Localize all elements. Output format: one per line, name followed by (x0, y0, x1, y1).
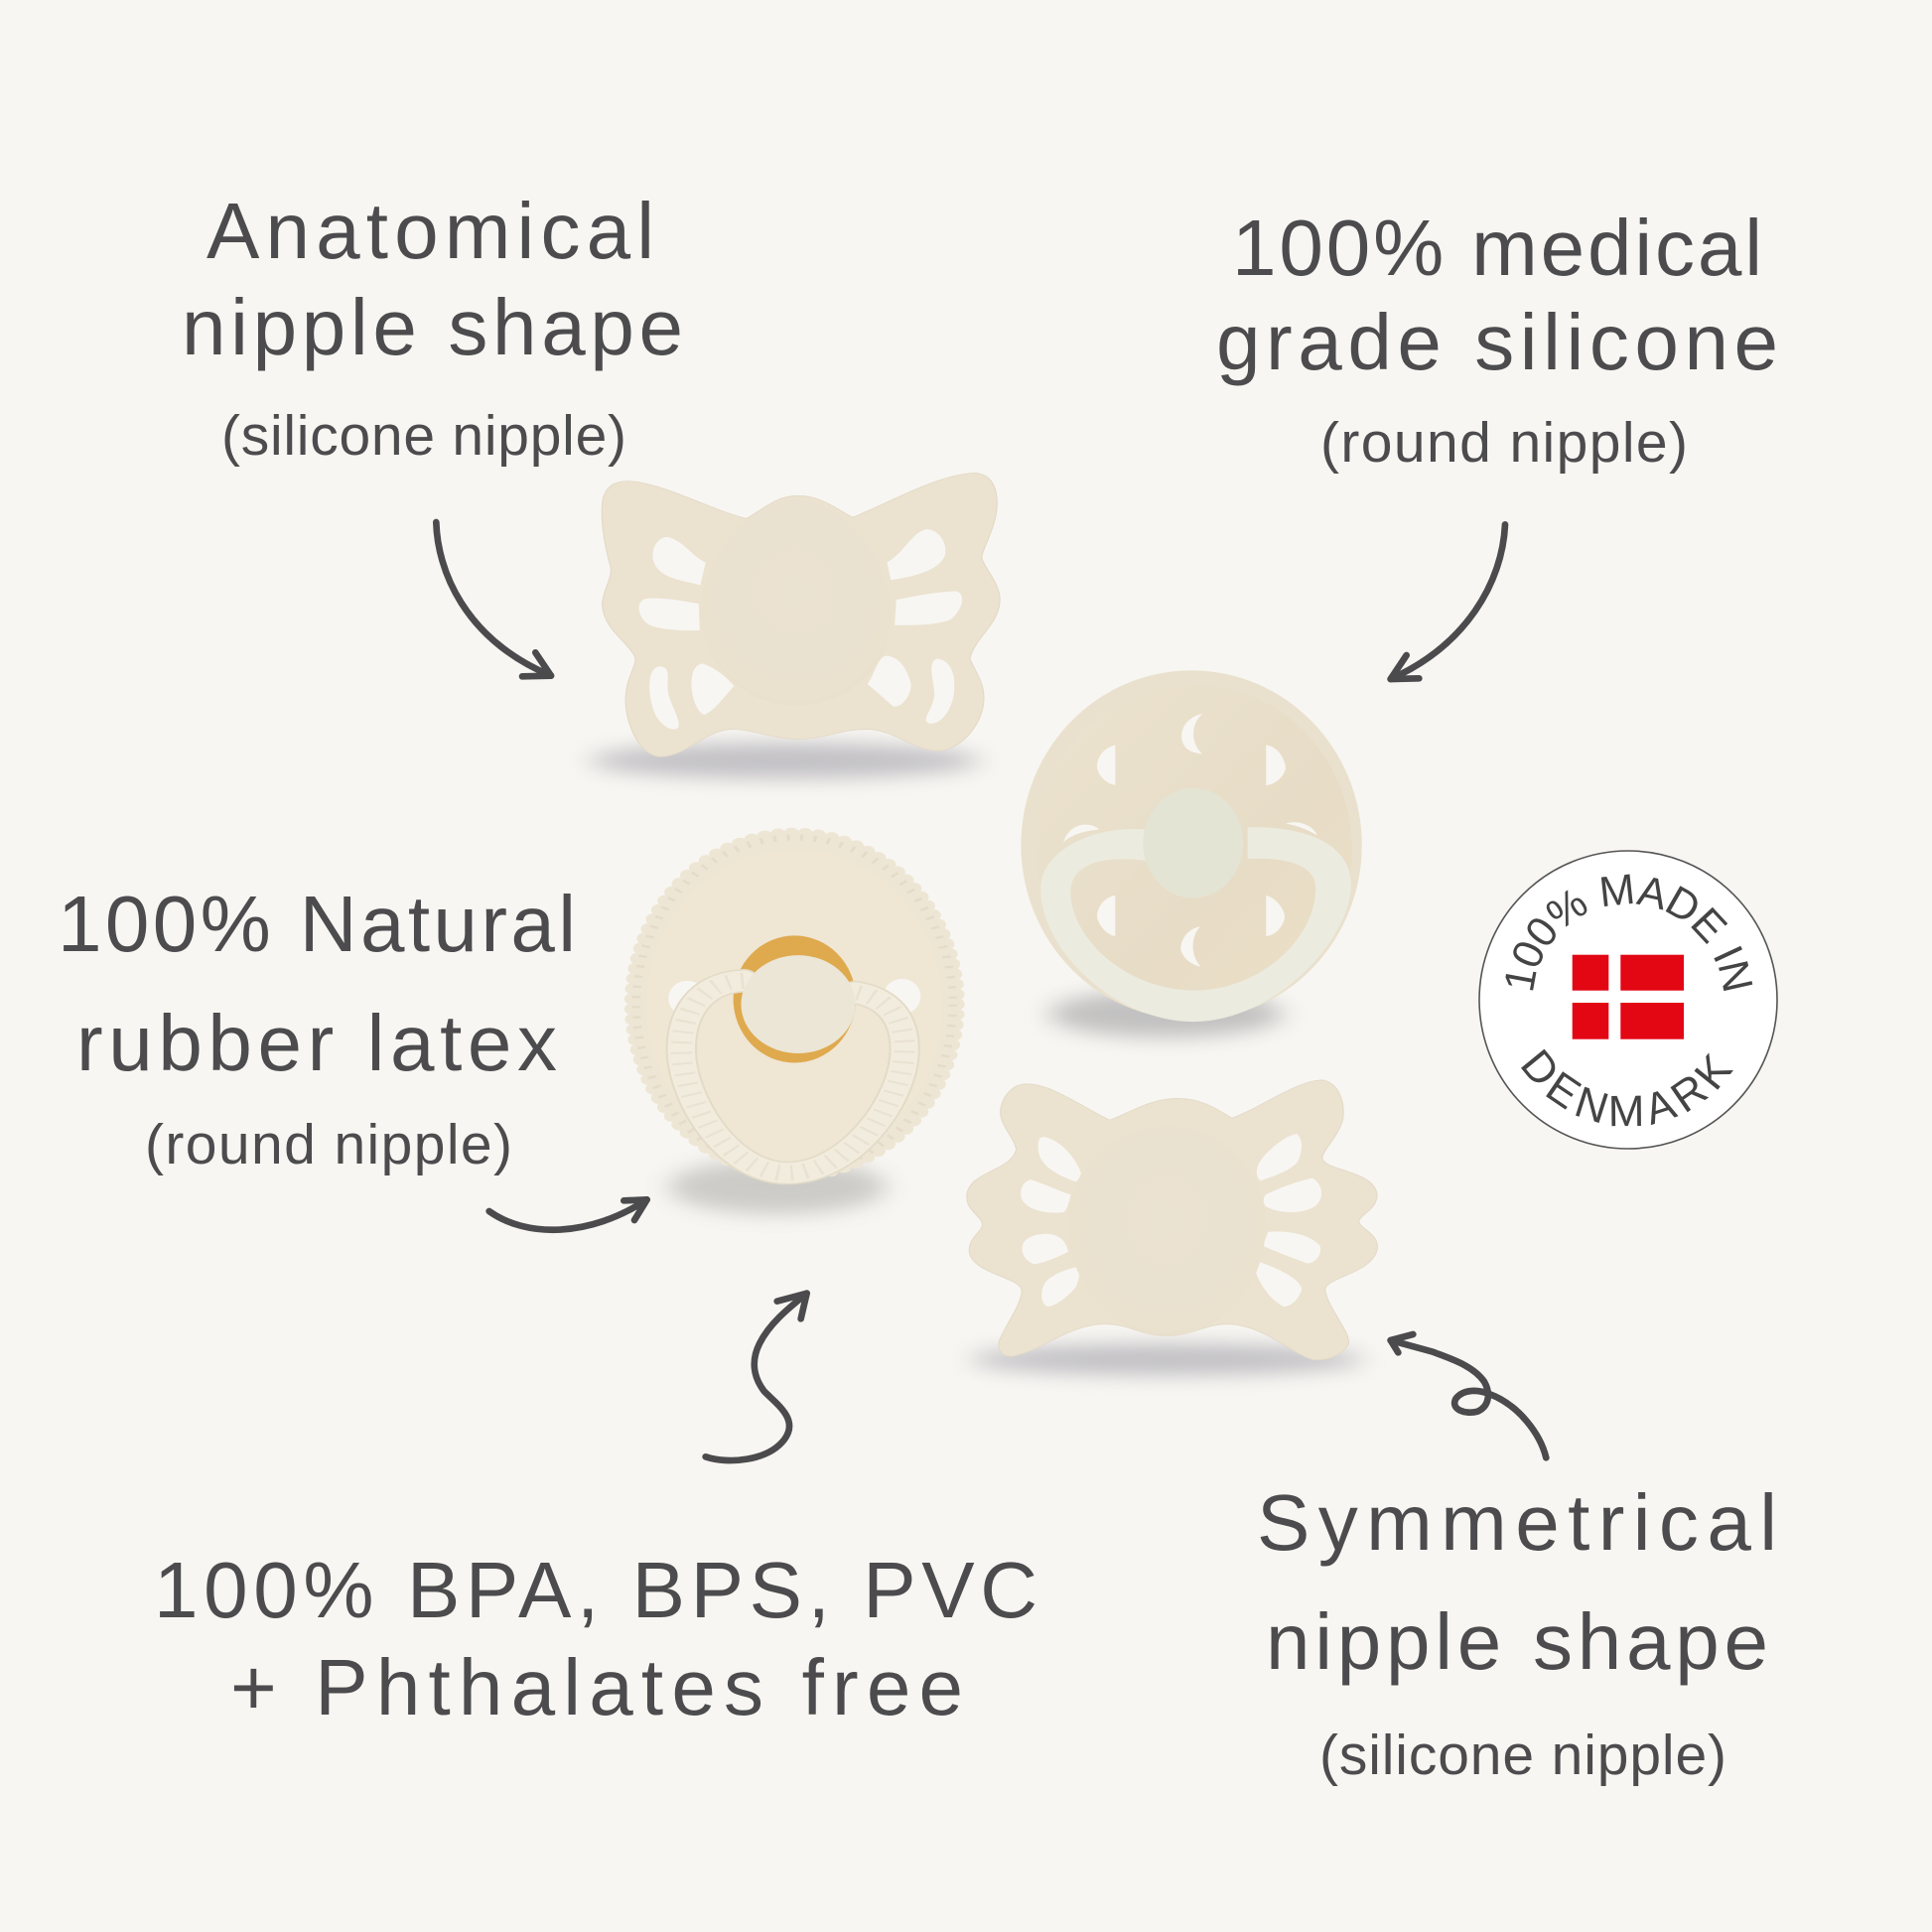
text block: anatomical nipple shape: (silicone nipple) (221, 404, 626, 468)
badge: made in Denmark (1478, 850, 1778, 1150)
text block: BPA free (154, 1546, 1037, 1731)
icon: Danish flag (1573, 955, 1684, 1039)
text block: symmetrical nipple shape: nipple shape (1266, 1597, 1768, 1686)
text block: medical grade silicone: grade silicone (1216, 298, 1778, 386)
arrow: BPA free (706, 1294, 807, 1460)
text block: symmetrical nipple shape: Symmetrical (1257, 1478, 1777, 1567)
text block: medical grade silicone: (round nipple) (1320, 411, 1688, 475)
text block: medical grade silicone: 100% medical (1232, 204, 1762, 292)
text block: symmetrical nipple shape: (silicone nipple) (1319, 1724, 1726, 1787)
text block: medical grade silicone (1216, 204, 1778, 475)
text block: anatomical nipple shape (182, 187, 683, 468)
badge: made in Denmark: DENMARK (1521, 1048, 1733, 1126)
arrow: anatomical (436, 522, 551, 676)
badge: made in Denmark: 100% MADE IN (1505, 874, 1753, 991)
text block: symmetrical nipple shape (1257, 1478, 1777, 1787)
arrow: natural rubber (489, 1199, 647, 1230)
pacifier: butterfly anatomical (589, 473, 1000, 778)
text block: natural rubber latex: 100% Natural (58, 880, 576, 968)
text block: natural rubber latex (58, 880, 576, 1176)
arrow: medical silicone (1391, 524, 1505, 679)
arrow: symmetrical (1391, 1334, 1546, 1457)
text block: natural rubber latex: rubber latex (76, 999, 557, 1087)
pacifier: moon phases (1021, 670, 1362, 1037)
text block: natural rubber latex: (round nipple) (145, 1113, 512, 1176)
text block: anatomical nipple shape: nipple shape (182, 283, 683, 371)
text block: anatomical nipple shape: Anatomical (207, 187, 654, 275)
text block: BPA free: 100% BPA, BPS, PVC (154, 1546, 1037, 1634)
pacifier: rope rubber latex (632, 834, 957, 1214)
text block: BPA free: + Phthalates free (230, 1643, 963, 1731)
pacifier: lace symmetrical (967, 1080, 1377, 1375)
